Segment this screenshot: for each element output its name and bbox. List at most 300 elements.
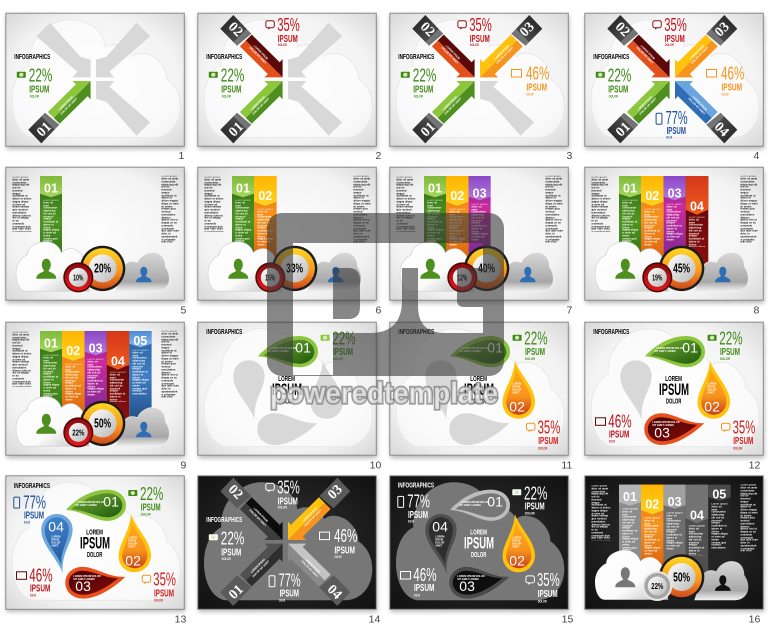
big donut 20% [80, 246, 125, 291]
small donut 22%: 22% [72, 428, 85, 438]
column 04: 04 [111, 355, 125, 369]
stat 35%: DOLOR [665, 43, 674, 47]
drop 04: DOLOR [51, 541, 61, 544]
arrow 01: LOREM IPSUM [637, 94, 653, 111]
stat 22%: 22% [29, 66, 52, 86]
stat 46%: 46% [334, 526, 357, 546]
stat 35%: IPSUM [278, 33, 298, 45]
heading: INFOGRAPHICS [206, 517, 243, 524]
arrow 03 [675, 15, 737, 77]
stat 46%: IPSUM [609, 428, 629, 440]
stat 46%: IPSUM [526, 82, 547, 94]
small donut 12% [447, 262, 477, 292]
column 02 [641, 176, 664, 266]
drop 02: 02 [509, 552, 525, 568]
slide number: 2 [375, 150, 381, 162]
slide 15: dark drops [390, 476, 573, 625]
drop 03: SIT AMET LOREM [457, 578, 479, 581]
background cloud [396, 20, 564, 138]
placeholder drops [425, 360, 509, 445]
column 04: 04 [690, 200, 704, 214]
background cloud [396, 482, 564, 600]
arrow 02: LOREM IPSUM [253, 44, 270, 61]
heading: INFOGRAPHICS [206, 54, 243, 61]
big donut 50% [80, 401, 125, 446]
stat 22% [401, 66, 436, 98]
stat 46%: DOLOR [30, 594, 36, 598]
drop 04: AMET [435, 544, 443, 547]
stat 22% [209, 528, 244, 561]
stat 35%: 35% [153, 569, 176, 589]
column 03: 03 [89, 341, 103, 355]
arrow 01: 01 [418, 120, 439, 140]
arrow 01: LOREM IPSUM [250, 557, 266, 574]
drop 04: 04 [432, 519, 448, 535]
stat 35% [266, 15, 300, 47]
arrow 01 [607, 81, 670, 143]
slide 16: dark columns [585, 476, 764, 625]
arrow 02: 02 [225, 482, 245, 503]
stat 35% [722, 417, 755, 450]
center title: LOREM [665, 374, 682, 383]
arrow 02 [412, 15, 475, 77]
column 02: 02 [450, 189, 464, 203]
drop 02: IPSUM [512, 386, 520, 389]
watermark logo [267, 213, 504, 376]
drop 02 [503, 514, 535, 572]
stat 35%: 35% [469, 15, 492, 35]
column 01 [619, 485, 641, 575]
column 02: 02 [66, 344, 80, 358]
stat 22%: DOLOR [525, 357, 535, 361]
background cloud [12, 482, 180, 600]
small donut 19% [642, 262, 672, 292]
background cloud [396, 329, 564, 447]
column 05: Lorem ipsum dolor sit amet consectetur adipiscing elit sed do eiusmod tempor incididunt ut labore et dolore magna aliqua ut enim ad minim veniam quis nostrud exercitation [711, 503, 728, 549]
stat 22%: 22% [524, 483, 547, 503]
drop 03 [65, 567, 125, 599]
drop 02: LOREM [128, 536, 137, 539]
stat 22%: IPSUM [608, 84, 628, 96]
slide number: 5 [180, 305, 186, 317]
center title: DOLOR [666, 398, 681, 405]
arrow 01: DOLOR SIT AMET [59, 96, 78, 116]
small donut 22% [642, 571, 672, 601]
small donut 19%: 19% [652, 272, 663, 282]
center title: IPSUM [272, 380, 302, 399]
center title [464, 374, 494, 405]
center title [659, 374, 689, 405]
heading: INFOGRAPHICS [398, 54, 435, 61]
stat 22%: DOLOR [720, 357, 730, 361]
arrow 01 [28, 81, 91, 143]
slide 8: four columns [585, 167, 764, 317]
column 01 [40, 331, 62, 421]
arrow 02: LOREM IPSUM [253, 507, 270, 523]
stat 46% [706, 63, 744, 96]
stat 77%: DOLOR [24, 520, 30, 524]
arrow 01 [220, 81, 283, 143]
stat 35%: DOLOR [733, 446, 743, 450]
drop 01: SIT AMET LOREM [75, 504, 97, 507]
small donut 22%: 22% [651, 581, 664, 591]
center title [80, 528, 110, 559]
stat 22%: DOLOR [525, 512, 535, 516]
center title: DOLOR [279, 398, 294, 405]
stat 22% [321, 329, 356, 361]
stat 77% [656, 108, 688, 140]
drop 02: AMET [128, 545, 136, 548]
column 04: 04 [690, 508, 704, 522]
stat 22% [17, 66, 52, 98]
center title: IPSUM [80, 534, 110, 553]
stat 77%: IPSUM [667, 125, 686, 137]
column 05: 05 [712, 488, 726, 502]
background cloud [591, 20, 759, 138]
drop 02: LOREM [512, 536, 521, 539]
stat 22%: DOLOR [30, 94, 39, 98]
column 01: 01 [44, 181, 58, 195]
drop 02: DOLOR [512, 389, 522, 392]
stat 22%: DOLOR [141, 512, 151, 516]
small donut 12%: 12% [457, 272, 468, 282]
drop 02: IPSUM [707, 386, 715, 389]
column 02: 02 [645, 189, 659, 203]
drop 01: SIT AMET LOREM [654, 350, 676, 353]
arrow 01: LOREM IPSUM [442, 94, 458, 111]
big donut 50%: 50% [673, 569, 690, 584]
slide 13: four drops [6, 476, 186, 625]
watermark wordmark: poweredtemplate [270, 377, 498, 410]
arrow 03: DOLOR SIT AMET [495, 45, 514, 65]
center title: IPSUM [464, 534, 494, 553]
drop 04 [41, 514, 73, 573]
stat 77%: 77% [279, 571, 301, 591]
drop 04: AMET [51, 544, 59, 547]
arrow 02 [607, 15, 670, 77]
stat 46%: 46% [608, 411, 632, 431]
column 02 [254, 176, 277, 266]
drop 03: SIT AMET LOREM [73, 578, 95, 581]
big donut 50% [659, 554, 704, 600]
stat 46%: DOLOR [609, 440, 615, 444]
stat 35% [526, 570, 560, 603]
placeholder arrow [480, 81, 534, 136]
stat 35%: 35% [537, 570, 560, 590]
stat 35%: DOLOR [538, 446, 548, 450]
stat 22%: IPSUM [525, 501, 545, 513]
small donut 10%: 10% [73, 272, 84, 282]
big donut 33% [272, 246, 317, 291]
stat 22%: IPSUM [221, 546, 241, 558]
stat 77%: IPSUM [24, 510, 44, 522]
arrow 02 [220, 15, 283, 77]
stat 77%: IPSUM [408, 509, 428, 521]
stat 46%: 46% [526, 63, 549, 83]
slide number: 6 [375, 305, 381, 317]
stat 77% [269, 571, 301, 602]
stat 22%: 22% [332, 329, 356, 349]
slide number: 4 [753, 150, 759, 162]
heading: INFOGRAPHICS [206, 329, 243, 336]
column 01: 01 [428, 181, 442, 195]
drop 02: LOREM [512, 383, 521, 386]
column 01 [232, 176, 254, 266]
drop 02: 02 [125, 552, 141, 568]
stat 22%: 22% [608, 66, 631, 86]
stat 35%: 35% [733, 417, 755, 437]
big donut 45%: 45% [673, 261, 690, 276]
watermark wordmark: poweredtemplate [270, 377, 498, 410]
stat 35%: DOLOR [278, 506, 287, 510]
clouds with people [595, 550, 748, 600]
clouds with people [595, 242, 748, 292]
clouds with people [16, 397, 169, 447]
stat 35%: 35% [277, 478, 300, 498]
big donut 50%: 50% [94, 416, 111, 431]
arrow 04 [288, 544, 350, 606]
stat 35% [653, 15, 687, 47]
drop 01 [450, 336, 510, 367]
arrow 03: 03 [712, 20, 733, 40]
stat 77%: 77% [23, 492, 46, 512]
slide 2: two arrows [198, 13, 381, 162]
column 01: 01 [236, 181, 250, 195]
drop 03: 03 [75, 578, 91, 594]
background cloud [591, 329, 759, 447]
stat 77%: 77% [666, 108, 688, 128]
arrow 03 [480, 15, 542, 77]
stat 22%: 22% [140, 484, 163, 504]
heading: INFOGRAPHICS [593, 54, 630, 61]
big donut 20%: 20% [94, 261, 111, 276]
column 01 [40, 176, 62, 266]
stat 35% [266, 478, 300, 510]
arrow 01 [220, 544, 283, 606]
arrow 01: DOLOR SIT AMET [443, 96, 462, 116]
stat 35%: DOLOR [538, 599, 547, 603]
center title: DOLOR [471, 552, 486, 559]
drop 01 [66, 490, 126, 521]
drop 02: 02 [704, 399, 720, 415]
drop 03: 03 [654, 424, 670, 440]
drop 01: 01 [295, 340, 311, 356]
slide number: 1 [178, 150, 184, 162]
column 01: 01 [623, 490, 637, 504]
stat 46% [512, 63, 549, 96]
drop 01 [450, 490, 510, 521]
arrow 01: 01 [226, 582, 247, 603]
stat 46%: IPSUM [414, 582, 434, 594]
slide 9: five columns [6, 322, 186, 472]
column 03 [664, 176, 686, 266]
column 03 [85, 331, 107, 421]
arrow 02: DOLOR SIT AMET [440, 46, 460, 65]
stat 46%: DOLOR [414, 593, 420, 597]
drop 02 [698, 361, 730, 419]
arrow 01: 01 [226, 120, 247, 140]
drop 03: LOREM IPSUM DOLOR [652, 421, 680, 424]
stat 46%: DOLOR [526, 92, 534, 96]
column 03 [664, 485, 686, 575]
slide number: 7 [566, 305, 572, 317]
arrow 02 [220, 478, 283, 540]
slide number: 13 [175, 613, 186, 625]
big donut 40% [464, 246, 509, 291]
arrow 03: 03 [325, 482, 346, 503]
arrow 03: DOLOR SIT AMET [690, 45, 709, 65]
stat 22% [209, 66, 244, 98]
slide 5: one column [6, 167, 186, 317]
placeholder arrows [36, 23, 150, 136]
stat 22%: IPSUM [141, 501, 161, 513]
column 04 [686, 485, 708, 575]
center title: IPSUM [659, 380, 689, 399]
drop 01: 01 [103, 493, 119, 509]
heading: INFOGRAPHICS [398, 483, 434, 490]
stat 22% [512, 483, 547, 516]
stat 22% [513, 329, 548, 361]
stat 77% [14, 492, 46, 524]
small donut 15% [255, 262, 285, 292]
arrow 03 [288, 478, 350, 540]
small donut 10% [63, 262, 93, 292]
background cloud [204, 482, 372, 600]
arrow 02: LOREM IPSUM [640, 44, 657, 61]
placeholder arrows [288, 23, 342, 136]
drop 01 [258, 336, 318, 367]
arrow 04: LOREM IPSUM [692, 95, 709, 112]
stat 22%: 22% [221, 66, 244, 86]
arrow 04: DOLOR SIT AMET [300, 559, 320, 578]
stat 46%: 46% [721, 63, 744, 83]
drop 03: 03 [459, 578, 475, 594]
heading: INFOGRAPHICS [14, 54, 51, 61]
arrow 03: LOREM IPSUM [689, 43, 705, 60]
column 05 [129, 331, 152, 421]
drop 02: AMET [707, 392, 715, 395]
slide 14: dark arrows [198, 476, 380, 625]
stat 46%: 46% [413, 565, 437, 585]
drop 01: LOREM IPSUM DOLOR [77, 501, 105, 504]
arrow 01: LOREM IPSUM [250, 94, 266, 111]
slide 3: three arrows [390, 13, 572, 162]
stat 46% [320, 526, 357, 559]
stat 77%: DOLOR [666, 136, 672, 140]
drop 01: LOREM IPSUM DOLOR [461, 347, 489, 350]
center title: LOREM [86, 528, 103, 537]
stat 22%: IPSUM [413, 84, 433, 96]
slide 7: three columns [390, 167, 572, 317]
stat 35%: DOLOR [278, 43, 287, 47]
column 02 [446, 176, 469, 266]
stat 46%: IPSUM [721, 82, 742, 94]
stat 35%: IPSUM [470, 33, 490, 45]
arrow 02: 02 [612, 20, 632, 40]
arrow 02: DOLOR SIT AMET [248, 508, 268, 527]
column 02: 02 [645, 498, 659, 512]
stat 46%: DOLOR [334, 555, 342, 559]
stat 22%: 22% [719, 329, 743, 349]
arrow 01 [412, 81, 475, 143]
drop 01: 01 [487, 340, 503, 356]
stat 22%: DOLOR [414, 94, 423, 98]
drop 03 [644, 413, 704, 445]
big donut 33%: 33% [286, 261, 303, 276]
stat 35%: DOLOR [470, 43, 479, 47]
arrow 01: DOLOR SIT AMET [251, 559, 270, 578]
drop 04: 04 [48, 519, 64, 535]
drop 04: LOREM [51, 535, 60, 538]
stat 22%: IPSUM [221, 84, 241, 96]
arrow 01: 01 [613, 120, 634, 140]
arrow 02: LOREM IPSUM [445, 44, 462, 61]
center title: DOLOR [87, 552, 102, 559]
column 03: 03 [473, 186, 487, 200]
stat 35%: IPSUM [278, 496, 298, 508]
drop 01: LOREM IPSUM DOLOR [269, 347, 297, 350]
stat 22% [596, 66, 631, 98]
stat 22%: IPSUM [29, 84, 49, 96]
column 01 [619, 176, 641, 266]
arrow 03: DOLOR SIT AMET [303, 508, 322, 527]
slide 1: first arrow [6, 13, 185, 162]
slide number: 8 [753, 305, 759, 317]
stat 22%: IPSUM [333, 346, 353, 358]
stat 35%: IPSUM [733, 435, 753, 447]
stat 46%: DOLOR [721, 92, 729, 96]
stat 35%: 35% [538, 417, 560, 437]
stat 22%: DOLOR [333, 357, 343, 361]
arrow 04: LOREM IPSUM [305, 558, 322, 574]
stat 77%: DOLOR [279, 598, 285, 602]
drop 02 [503, 361, 535, 419]
stat 46% [400, 565, 437, 597]
drop 01: SIT AMET LOREM [459, 350, 481, 353]
stat 77%: DOLOR [408, 520, 414, 524]
column 02 [62, 331, 85, 421]
center title [272, 374, 302, 405]
column 05 [708, 485, 731, 575]
drop 01: SIT AMET LOREM [459, 504, 481, 507]
stat 46%: 46% [29, 565, 53, 585]
drop 02: AMET [512, 545, 520, 548]
arrow 01: DOLOR SIT AMET [251, 96, 270, 116]
drop 02: AMET [512, 392, 520, 395]
drop 01: LOREM IPSUM DOLOR [656, 347, 684, 350]
slide number: 14 [369, 613, 380, 625]
arrow 03: 03 [517, 20, 538, 40]
center title: LOREM [470, 528, 487, 537]
drop 02 [119, 514, 151, 572]
stat 22%: DOLOR [222, 557, 231, 561]
stat 77% [398, 492, 430, 524]
stat 22%: DOLOR [609, 94, 618, 98]
drop 04: IPSUM [51, 538, 59, 541]
column 05: Lorem ipsum dolor sit amet consectetur adipiscing elit sed do eiusmod tempor incididunt ut labore et dolore magna aliqua ut enim ad minim veniam quis nostrud exercitation [132, 350, 149, 396]
slide 4: four arrows [585, 13, 764, 162]
drop 04: IPSUM [435, 538, 443, 541]
stat 77%: IPSUM [280, 588, 299, 600]
column 03: 03 [668, 495, 682, 509]
column 02: 02 [258, 189, 272, 203]
center title: LOREM [278, 374, 295, 383]
background cloud [204, 329, 372, 447]
drop 04: LOREM [435, 535, 444, 538]
column 04 [107, 331, 129, 421]
stat 77%: 77% [407, 492, 430, 512]
slide number: 3 [566, 150, 572, 162]
